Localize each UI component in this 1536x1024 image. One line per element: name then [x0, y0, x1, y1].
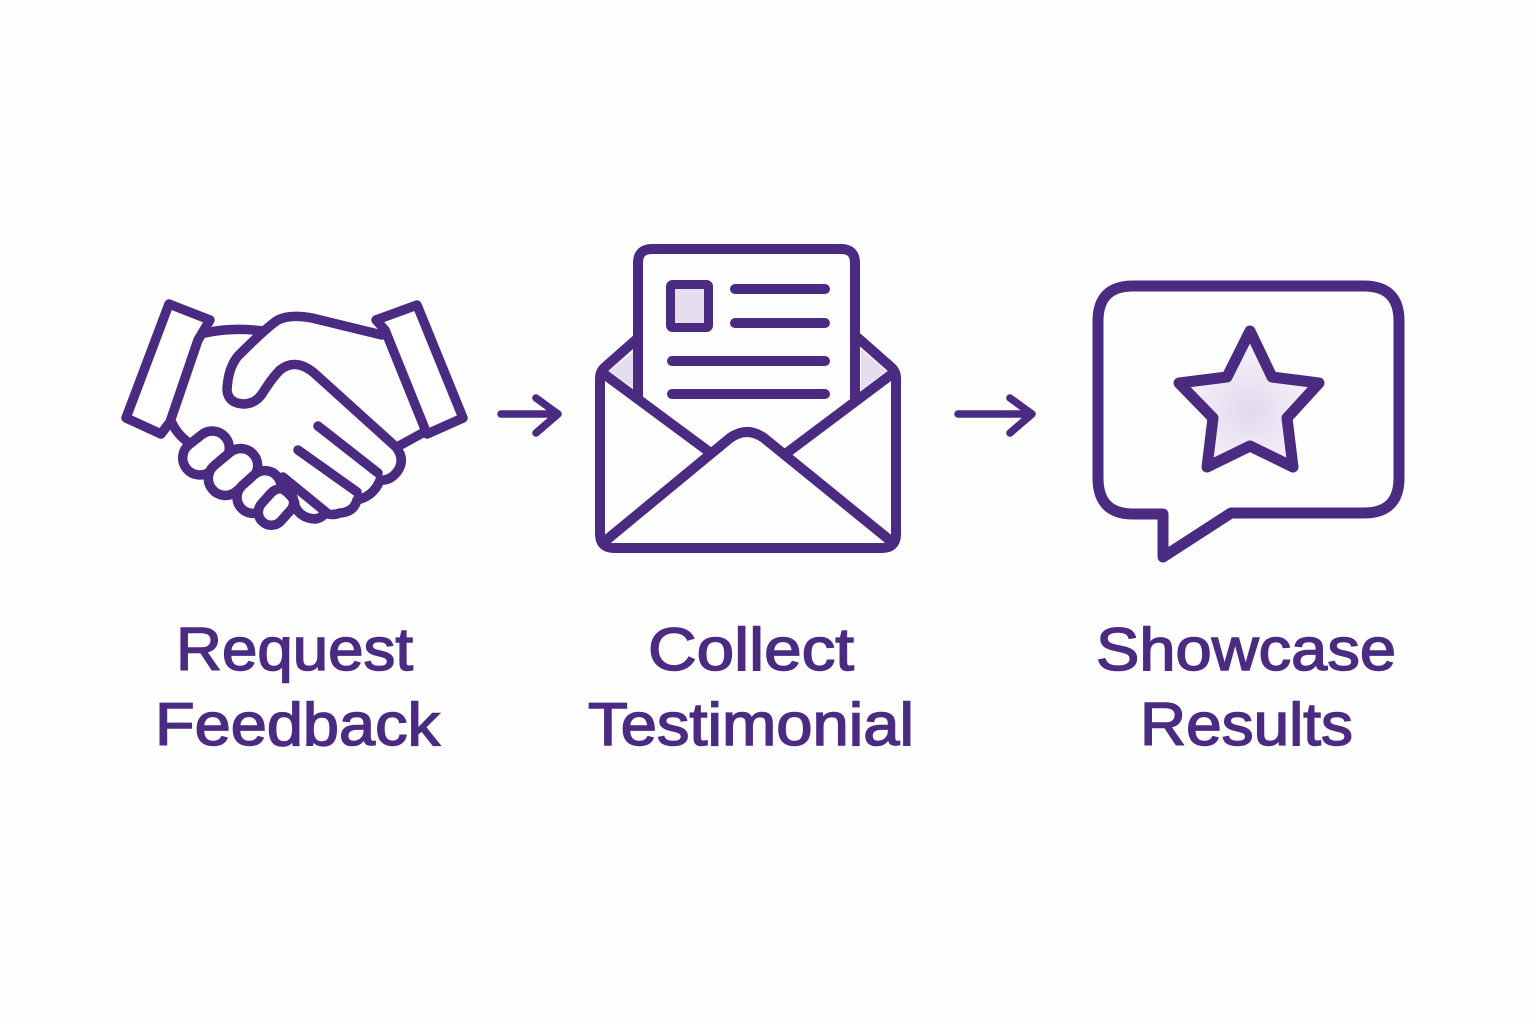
letter photo box — [670, 284, 708, 328]
star — [1179, 331, 1319, 467]
right cuff — [376, 305, 463, 434]
icon: envelope with letter — [600, 249, 896, 548]
right hand finger lines — [283, 426, 378, 513]
icon: speech bubble with star — [1098, 286, 1399, 557]
icon: handshake — [126, 304, 463, 531]
arrow: step two to step three — [958, 398, 1032, 433]
label: Showcase Results: Showcase — [1096, 616, 1396, 683]
label: Showcase Results: Results — [1140, 691, 1353, 758]
label: Collect Testimonial: Testimonial — [588, 691, 914, 758]
speech bubble outline — [1098, 286, 1399, 557]
label: Request Feedback: Feedback — [155, 691, 441, 758]
right wrist — [397, 430, 428, 447]
label: Request Feedback: Request — [176, 616, 413, 683]
label: Collect Testimonial: Collect — [648, 616, 854, 683]
lower knuckle fingers — [176, 424, 325, 531]
envelope front flap — [604, 432, 892, 542]
right hand outline — [227, 316, 401, 514]
envelope body — [600, 338, 896, 548]
label: Request Feedback — [155, 616, 441, 758]
label: Showcase Results — [1096, 616, 1396, 758]
envelope back flap tints — [609, 349, 886, 390]
envelope inner fold lines — [604, 374, 892, 452]
letter sheet — [638, 249, 855, 398]
label: Collect Testimonial — [588, 616, 914, 758]
arrow: step one to step two — [501, 398, 558, 433]
letter text lines — [672, 289, 825, 394]
left cuff — [126, 304, 210, 434]
left wrist and lower palm — [172, 329, 263, 445]
